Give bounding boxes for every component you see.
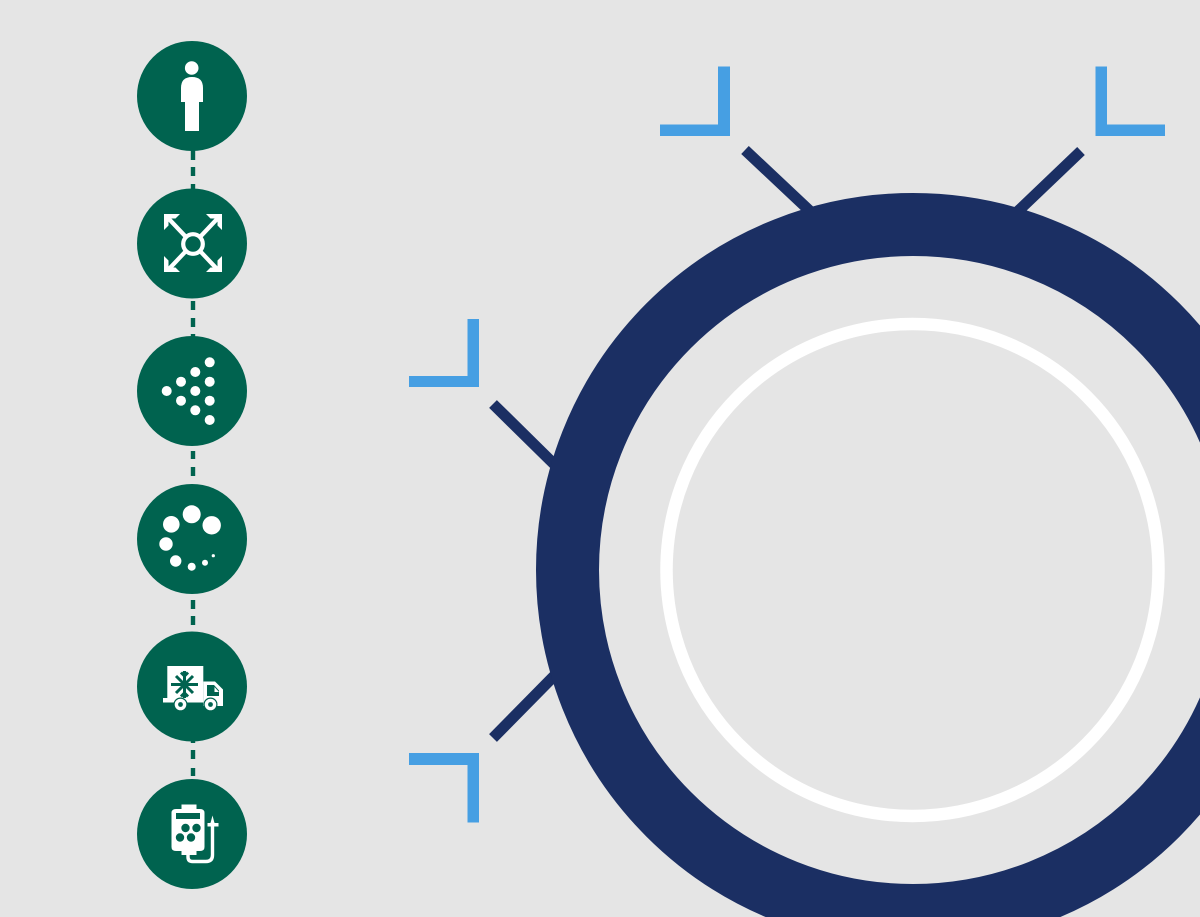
callout bracket: upper left [660, 66, 730, 136]
outer navy ring [568, 224, 1200, 916]
step 2: expansion arrows icon [137, 188, 247, 298]
callout connector: upper left [745, 150, 812, 213]
callout bracket: upper right [1096, 66, 1165, 136]
dashed connector: step 3 to 4 [191, 451, 195, 476]
callout connector: upper right [1015, 151, 1081, 214]
step 5: refrigerated truck icon [137, 632, 247, 742]
snowflake [171, 671, 198, 698]
callout bracket: middle left [409, 319, 479, 387]
process timeline [137, 41, 247, 889]
callout bracket: lower left [409, 753, 479, 822]
step 3: atomised spray dots icon [137, 336, 247, 446]
step 1: person icon [137, 41, 247, 151]
truck wheels [174, 698, 217, 711]
dashed connector: step 1 to 2 [191, 150, 195, 192]
dashed connector: step 2 to 3 [191, 301, 195, 340]
step 4: swirl of shrinking dots icon [137, 484, 247, 594]
inner white ring [666, 324, 1158, 816]
callout connector: lower left [493, 673, 557, 738]
callout connector: middle left [493, 404, 557, 467]
dashed connector: step 4 to 5 [191, 600, 195, 625]
step 6: infusion pump icon [137, 779, 247, 889]
dashed connector: step 5 to 6 [191, 738, 195, 776]
central ring diagram [493, 150, 1200, 916]
